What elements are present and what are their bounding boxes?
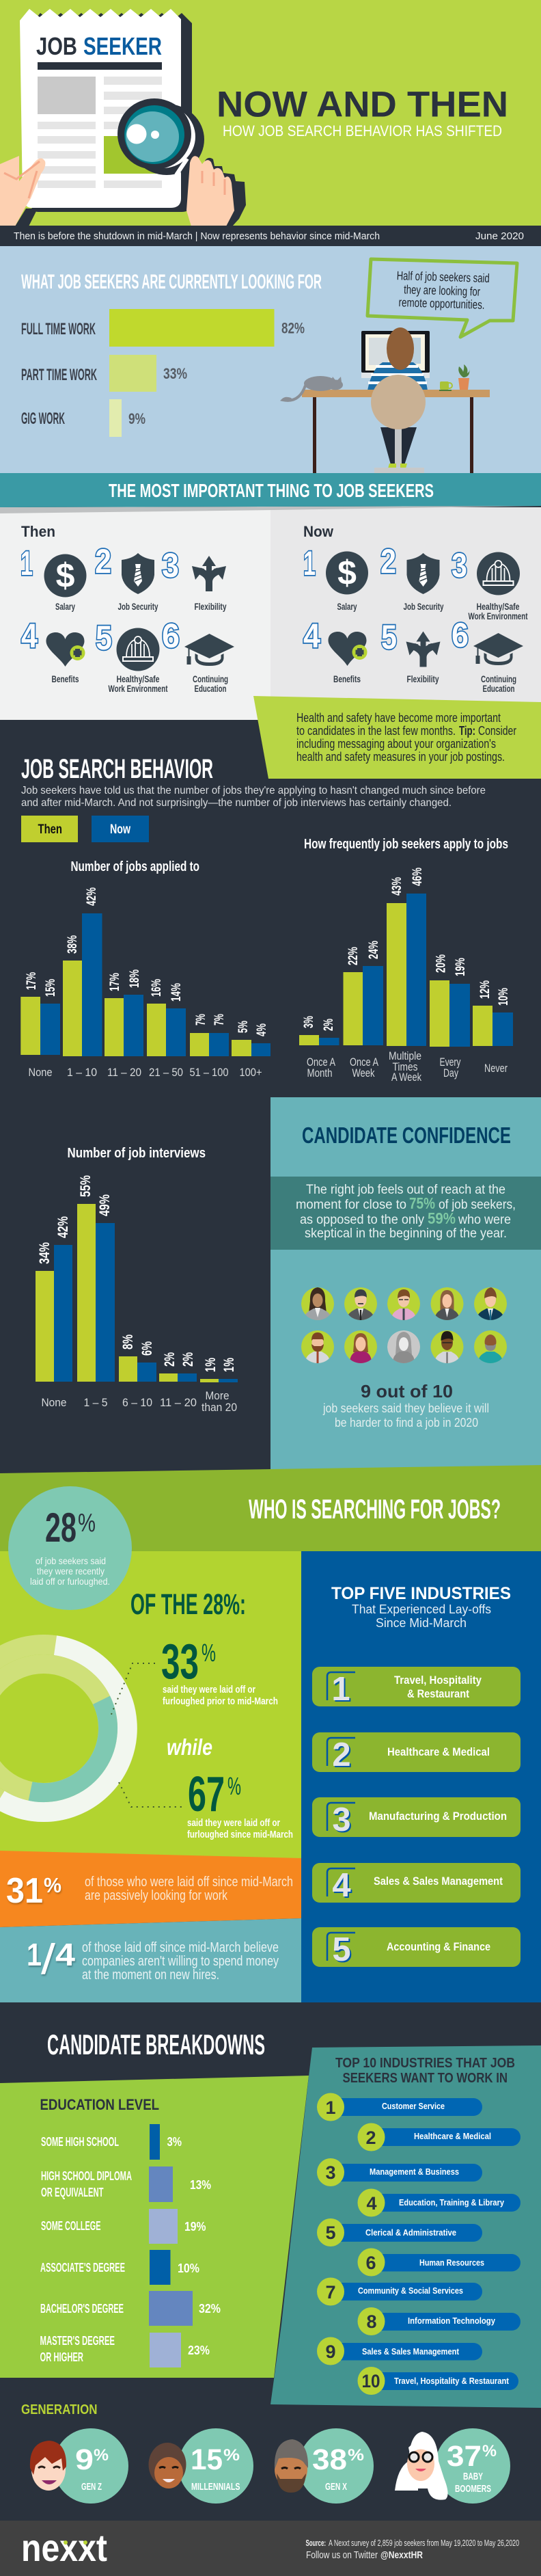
then ranking: 3 xyxy=(162,546,179,585)
callout: health and safety tip: to candidates in the last few months. xyxy=(296,724,456,738)
statement band: The right job feels out of reach at the xyxy=(306,1183,505,1197)
item 6: Human Resources xyxy=(419,2257,484,2268)
now ranking: 5 xyxy=(381,618,397,656)
generation: gen x: GEN X xyxy=(325,2481,347,2493)
then ranking: 4 xyxy=(21,617,38,655)
panel background: candidate confidence xyxy=(270,1097,541,1473)
bar chart: number of job interviews: 2% xyxy=(162,1352,178,1367)
now ranking: Education xyxy=(482,683,515,694)
then ranking xyxy=(20,523,234,694)
bar chart: number of job interviews: 55% xyxy=(78,1175,94,1197)
bar chart: number of job interviews: 11 – 20 xyxy=(160,1396,197,1409)
bar chart: how frequently job seekers apply: Day xyxy=(443,1066,458,1079)
bar chart: number of job interviews: 6 – 10 xyxy=(122,1396,152,1409)
bar chart: number of jobs applied to: 38% xyxy=(66,935,80,954)
stat: 9 out of 10: be harder to find a job in 2020 xyxy=(335,1416,478,1430)
generation: millennials xyxy=(149,2428,253,2504)
stat: 67%: said they were laid off or xyxy=(187,1818,280,1829)
bar chart: how frequently job seekers apply: Month xyxy=(307,1066,332,1079)
generation: gen x: 38 xyxy=(312,2443,347,2476)
stat circle: 28%: they were recently xyxy=(37,1566,105,1577)
statement band: skeptical in the beginning of the year. xyxy=(305,1226,507,1241)
bar chart: number of jobs applied to: 42% xyxy=(85,887,99,906)
bar chart: number of jobs applied to: None xyxy=(29,1066,52,1079)
bar chart: number of jobs applied to: 5% xyxy=(236,1021,251,1033)
callout: health and safety tip xyxy=(253,696,541,779)
industry 1 xyxy=(312,1667,521,1708)
avatar: woman dark jacket xyxy=(430,1287,463,1320)
callout: health and safety tip: Consider xyxy=(478,724,516,738)
item 1: 1 xyxy=(325,2097,336,2118)
definition band xyxy=(0,226,541,246)
bar: high school diploma: 13% xyxy=(190,2178,211,2192)
industry 5 xyxy=(312,1927,521,1968)
bar chart: work type: 82% xyxy=(281,320,305,336)
bar: high school diploma: HIGH SCHOOL DIPLOMA xyxy=(41,2169,132,2183)
item 7: Community & Social Services xyxy=(358,2285,463,2296)
item 5: Clerical & Administrative xyxy=(365,2227,456,2238)
bar chart: number of jobs applied to: 11 – 20 xyxy=(107,1066,141,1079)
now ranking xyxy=(303,523,528,694)
panel: top five industries xyxy=(312,1584,521,1968)
stat: 33%: furloughed prior to mid-March xyxy=(163,1696,278,1707)
item 3: Management & Business xyxy=(370,2166,459,2177)
bar chart: work type: 33% xyxy=(163,365,187,382)
bar: master's degree: 23% xyxy=(188,2344,210,2357)
avatar: man grey suit xyxy=(344,1287,377,1320)
heading: SEEKERS WANT TO WORK IN xyxy=(343,2071,508,2086)
avatar: bearded man red tie xyxy=(301,1330,334,1363)
now ranking: 3 xyxy=(452,546,467,585)
source note: @NexxtHR xyxy=(380,2549,423,2561)
statement band: 59% xyxy=(428,1209,456,1227)
heading: TOP FIVE INDUSTRIES xyxy=(331,1584,511,1603)
leader line: 33% xyxy=(111,1663,155,1716)
legend: Now xyxy=(110,822,130,837)
heading xyxy=(331,1584,511,1630)
generation: baby boomers: BABY xyxy=(463,2471,483,2482)
heading: EDUCATION LEVEL xyxy=(40,2096,159,2113)
item 10 xyxy=(358,2367,518,2395)
industry 2: Healthcare & Medical xyxy=(387,1745,490,1758)
bar chart: number of job interviews: 49% xyxy=(97,1194,113,1216)
generation: millennials: 15 xyxy=(191,2443,223,2476)
stat circle: 28%: 28 xyxy=(45,1505,77,1551)
generation: gen z: GEN Z xyxy=(81,2481,102,2493)
heading: Since Mid-March xyxy=(376,1616,467,1630)
callout: remote opportunities xyxy=(367,259,517,337)
bar chart: number of job interviews: 6% xyxy=(139,1341,155,1356)
callout: health and safety tip: including messaging about your organization's xyxy=(296,737,496,751)
leader line: 67% xyxy=(119,1782,183,1807)
bar chart: how frequently job seekers apply xyxy=(299,837,513,1084)
bar: master's degree xyxy=(40,2333,210,2367)
legend: Then xyxy=(38,822,62,837)
bar chart: how frequently job seekers apply: Week xyxy=(352,1066,375,1079)
stat: 9 out of 10: 9 out of 10 xyxy=(361,1381,453,1401)
then ranking: Continuing xyxy=(193,673,228,684)
generation: gen x: % xyxy=(348,2446,364,2465)
bar chart: number of job interviews: than 20 xyxy=(202,1401,237,1414)
callout: health and safety tip: Tip: xyxy=(459,724,475,738)
title: NOW AND THEN xyxy=(217,85,508,124)
industry 4: Sales & Sales Management xyxy=(374,1875,503,1888)
then ranking: Benefits xyxy=(52,673,79,684)
band: 31% passively looking: 31 xyxy=(6,1871,43,1911)
bar chart: how frequently job seekers apply: 22% xyxy=(346,947,361,965)
generation: gen z xyxy=(30,2428,128,2504)
panel: currently looking for xyxy=(0,246,541,474)
then ranking: Work Environment xyxy=(108,683,168,694)
definition band: June 2020 xyxy=(475,231,524,242)
bar: bachelor's degree xyxy=(40,2291,221,2326)
band: 1/4 believe xyxy=(0,1918,301,2003)
heading: TOP 10 INDUSTRIES THAT JOB xyxy=(335,2056,515,2071)
industry 1: & Restaurant xyxy=(407,1687,469,1700)
stat: 67%: furloughed since mid-March xyxy=(187,1829,293,1840)
now ranking: Now xyxy=(303,523,334,540)
bar chart: how frequently job seekers apply: Once A xyxy=(307,1056,335,1069)
industry 3 xyxy=(312,1797,521,1838)
now ranking: 2 xyxy=(380,542,396,580)
industry 2 xyxy=(312,1732,521,1773)
industry 1: Travel, Hospitality xyxy=(394,1674,482,1687)
bar: associate's degree: ASSOCIATE'S DEGREE xyxy=(40,2261,125,2275)
avatar: grey silhouette xyxy=(387,1330,420,1363)
bar chart: how frequently job seekers apply: 43% xyxy=(390,877,404,896)
item 7 xyxy=(317,2278,482,2305)
bar chart: work type: 9% xyxy=(128,410,145,427)
item 2 xyxy=(358,2123,521,2151)
stat: 9 out of 10: job seekers said they believe it will xyxy=(322,1401,489,1415)
avatar: man pink shirt glasses xyxy=(387,1287,420,1320)
item 5 xyxy=(317,2218,482,2246)
industry 5: 5 xyxy=(332,1931,351,1968)
band: 1/4 believe: 4 xyxy=(55,1937,75,1972)
illustration: newspaper with hands and magnifier xyxy=(0,9,246,226)
item 9: 9 xyxy=(325,2342,336,2362)
then ranking: Education xyxy=(194,683,227,694)
band: 31% passively looking xyxy=(0,1851,301,1927)
bar chart: number of job interviews: 1 – 5 xyxy=(83,1396,108,1409)
bar chart: how frequently job seekers apply: Times xyxy=(392,1060,418,1073)
item 2: 2 xyxy=(365,2128,376,2148)
bar chart: number of job interviews: More xyxy=(205,1389,230,1402)
bar: bachelor's degree: BACHELOR'S DEGREE xyxy=(40,2302,124,2316)
heading: of the 28%: OF THE 28%: xyxy=(130,1588,246,1621)
statement band: 75% xyxy=(409,1194,435,1212)
bar chart: number of job interviews: 2% xyxy=(180,1352,196,1367)
then ranking: Flexibility xyxy=(194,601,227,612)
item 8: Information Technology xyxy=(408,2316,496,2326)
source note xyxy=(306,2538,519,2561)
statement band: of job seekers, xyxy=(439,1198,516,1212)
bar chart: number of job interviews: 34% xyxy=(37,1242,53,1264)
bar chart: number of jobs applied to: 7% xyxy=(212,1014,227,1025)
item 4 xyxy=(358,2189,521,2216)
now ranking: Job Security xyxy=(403,601,444,612)
industry 5: Accounting & Finance xyxy=(387,1940,490,1953)
band: 31% passively looking: % xyxy=(44,1873,61,1897)
source note: Follow us on Twitter xyxy=(306,2549,378,2561)
heading: That Experienced Lay-offs xyxy=(352,1602,491,1616)
stat: 33%: said they were laid off or xyxy=(163,1685,255,1695)
statement band: moment for close to xyxy=(296,1198,406,1212)
bar: bachelor's degree: 32% xyxy=(199,2302,221,2316)
bar chart: how frequently job seekers apply: 2% xyxy=(322,1019,336,1031)
stat circle: 28% xyxy=(8,1486,132,1610)
then ranking: 6 xyxy=(162,617,180,655)
stat: 67% xyxy=(187,1767,293,1840)
item 7: 7 xyxy=(325,2282,336,2303)
bar chart: how frequently job seekers apply: Multiple xyxy=(389,1049,421,1062)
word: while: while xyxy=(167,1734,212,1760)
bar chart: number of jobs applied to: 17% xyxy=(108,973,122,991)
band: 1/4 believe: / xyxy=(41,1936,56,1983)
then ranking: Job Security xyxy=(117,601,158,612)
bar chart: how frequently job seekers apply: Never xyxy=(484,1062,508,1075)
bar: some college xyxy=(41,2209,206,2244)
generation: baby boomers xyxy=(395,2428,510,2504)
item 4: 4 xyxy=(366,2193,377,2214)
bar chart: work type xyxy=(21,309,305,437)
band: 1/4 believe: companies aren't willing to spend money xyxy=(82,1954,279,1969)
now ranking: 1 xyxy=(303,544,316,582)
generation: baby boomers: BOOMERS xyxy=(455,2483,491,2495)
then ranking: Salary xyxy=(55,601,75,612)
stat: 67%: 67 xyxy=(188,1767,225,1822)
stat circle: 28%: laid off or furloughed. xyxy=(30,1576,110,1587)
header background xyxy=(0,0,541,226)
bar chart: how frequently job seekers apply: 20% xyxy=(434,954,448,973)
now ranking: Continuing xyxy=(481,673,516,684)
stat: 33%: % xyxy=(202,1639,216,1667)
industry 3: 3 xyxy=(332,1801,351,1838)
generation: millennials: % xyxy=(223,2446,240,2465)
then ranking: 2 xyxy=(95,542,111,580)
now ranking: 4 xyxy=(303,617,320,655)
panel background: now xyxy=(270,507,541,726)
dark section background: candidate breakdowns xyxy=(0,2002,541,2522)
subtitle: HOW JOB SEARCH BEHAVIOR HAS SHIFTED xyxy=(223,122,502,139)
industry 4 xyxy=(312,1863,521,1904)
legend xyxy=(21,816,149,842)
bar chart: how frequently job seekers apply: Once A xyxy=(350,1056,378,1069)
donut chart xyxy=(0,1645,127,1812)
item 6 xyxy=(358,2248,521,2277)
bar chart: work type: GIG WORK xyxy=(21,410,65,428)
bar: master's degree: OR HIGHER xyxy=(40,2350,83,2364)
stat: 33% xyxy=(161,1635,278,1707)
bar chart: how frequently job seekers apply: 10% xyxy=(497,988,511,1006)
now ranking: 6 xyxy=(452,616,469,654)
bar: some high school: 3% xyxy=(167,2135,182,2149)
generation: baby boomers: % xyxy=(482,2442,497,2460)
item 6: 6 xyxy=(365,2253,376,2273)
generation: millennials: MILLENNIALS xyxy=(191,2481,240,2493)
avatar: man navy suit xyxy=(474,1287,507,1320)
generation: gen x xyxy=(275,2428,374,2504)
section banner: most important xyxy=(0,473,541,507)
definition band: Then is before the shutdown in mid-March | Now represents behavior since mid-March xyxy=(14,231,380,242)
now ranking: Benefits xyxy=(333,673,361,684)
generation: gen z: % xyxy=(94,2446,109,2465)
heading: job search behavior: JOB SEARCH BEHAVIOR xyxy=(21,754,213,784)
bar chart: number of jobs applied to: 21 – 50 xyxy=(149,1066,183,1079)
industry 3: Manufacturing & Production xyxy=(369,1810,507,1823)
item 3: 3 xyxy=(325,2162,336,2183)
bar chart: how frequently job seekers apply: 19% xyxy=(454,958,468,976)
bar chart: work type: FULL TIME WORK xyxy=(21,320,96,338)
bar chart: number of job interviews: 1% xyxy=(221,1358,237,1372)
statement band xyxy=(270,1177,541,1250)
bar: some high school: SOME HIGH SCHOOL xyxy=(41,2135,119,2149)
stat: 33%: 33 xyxy=(161,1635,199,1689)
band: 1/4 believe: at the moment on new hires. xyxy=(82,1968,219,1983)
heading xyxy=(335,2056,515,2086)
bar: some college: 19% xyxy=(184,2220,206,2233)
industry 2: 2 xyxy=(332,1736,351,1773)
heading: candidate breakdowns: CANDIDATE BREAKDOWNS xyxy=(47,2028,265,2061)
stat: 9 out of 10 xyxy=(322,1381,489,1430)
panel: of the 28% xyxy=(0,1551,301,1859)
bar chart: number of job interviews: 8% xyxy=(120,1334,136,1350)
stat circle: 28%: % xyxy=(78,1509,96,1538)
intro paragraph: and after mid-March. And not surprisingly—the number of job interviews has certainly changed. xyxy=(21,797,452,809)
bar chart: number of jobs applied to: 1 – 10 xyxy=(67,1066,97,1079)
industry 4: 4 xyxy=(332,1867,351,1904)
bar chart: number of job interviews xyxy=(36,1146,238,1414)
bar chart: number of jobs applied to: 18% xyxy=(128,969,142,988)
item 8 xyxy=(358,2307,521,2335)
now ranking: Healthy/Safe xyxy=(477,601,520,612)
bar chart: how frequently job seekers apply: 3% xyxy=(302,1016,316,1028)
item 2: Healthcare & Medical xyxy=(414,2131,491,2141)
panel: candidate confidence xyxy=(270,1123,541,1430)
item 9: Sales & Sales Management xyxy=(362,2346,460,2357)
panel: education level xyxy=(0,2076,309,2378)
bar chart: how frequently job seekers apply: 12% xyxy=(478,980,493,999)
item 3 xyxy=(317,2158,482,2186)
band: 31% passively looking: of those who were laid off since mid-March xyxy=(85,1875,293,1890)
then ranking: Then xyxy=(21,523,55,540)
item 10: Travel, Hospitality & Restaurant xyxy=(394,2376,510,2386)
industry 1: 1 xyxy=(331,1671,350,1708)
then ranking: 1 xyxy=(20,544,33,582)
bar: some college: SOME COLLEGE xyxy=(41,2219,101,2233)
bar chart: number of jobs applied to: 17% xyxy=(25,972,39,990)
bar chart: how frequently job seekers apply: 46% xyxy=(411,868,425,886)
avatar: woman magenta top xyxy=(344,1330,377,1363)
panel: top 10 industries xyxy=(270,2045,541,2408)
bar chart: work type: PART TIME WORK xyxy=(21,366,97,384)
heading: generation: GENERATION xyxy=(21,2402,97,2417)
bar chart: how frequently job seekers apply: 24% xyxy=(367,941,381,959)
stat circle: 28%: of job seekers said xyxy=(36,1555,106,1566)
then ranking: 5 xyxy=(96,619,112,657)
intro paragraph: Job seekers have told us that the number of jobs they're applying to hasn't changed much since before xyxy=(21,785,486,796)
illustration: woman at desk with cat xyxy=(283,327,490,473)
bar chart: number of jobs applied to: 16% xyxy=(150,979,164,997)
bar chart: how frequently job seekers apply: A Week xyxy=(391,1071,421,1084)
bar chart: number of job interviews: 1% xyxy=(203,1358,219,1372)
section banner: who is searching xyxy=(0,1465,541,1551)
footer xyxy=(0,2521,541,2576)
bar chart: number of job interviews: None xyxy=(41,1396,67,1409)
panel background: then xyxy=(0,507,270,726)
bar: high school diploma: OR EQUIVALENT xyxy=(41,2186,104,2199)
illustration: newspaper with hands and magnifier: SEEKER xyxy=(83,32,162,60)
bar chart: number of job interviews: 42% xyxy=(55,1216,71,1238)
bar chart: number of jobs applied to: 15% xyxy=(44,979,58,997)
bar: master's degree: MASTER'S DEGREE xyxy=(40,2334,115,2348)
bar: associate's degree xyxy=(40,2250,199,2285)
band: 31% passively looking: are passively looking for work xyxy=(85,1888,228,1903)
avatar: dark man glasses xyxy=(430,1330,463,1363)
statement band: as opposed to the only xyxy=(300,1213,424,1227)
bar chart: number of jobs applied to: 100+ xyxy=(239,1066,262,1079)
item 1 xyxy=(317,2093,482,2121)
generation: gen z: 9 xyxy=(75,2443,94,2476)
item 10: 10 xyxy=(362,2371,380,2391)
avatar: bald man grey beard xyxy=(474,1330,507,1363)
panel: top five industries background xyxy=(301,1551,541,2003)
bar chart: number of jobs applied to: 51 – 100 xyxy=(190,1066,228,1079)
bar chart: how frequently job seekers apply: Every xyxy=(440,1056,461,1069)
logo: nexxt: nexxt xyxy=(21,2526,107,2569)
band: 1/4 believe: of those laid off since mid-March believe xyxy=(82,1940,279,1955)
callout: remote opportunities: they are looking for xyxy=(404,282,480,299)
item 5: 5 xyxy=(325,2223,336,2243)
band: 1/4 believe: 1 xyxy=(27,1937,42,1972)
bar chart: number of jobs applied to: Number of jobs applied to xyxy=(71,859,199,874)
dark section background: job search behavior xyxy=(0,720,541,1473)
callout: remote opportunities: Half of job seekers said xyxy=(396,269,490,285)
bar chart: number of jobs applied to: 7% xyxy=(194,1014,208,1025)
bar: some high school xyxy=(41,2124,182,2160)
avatar: woman long dark hair xyxy=(301,1287,334,1320)
bar: high school diploma xyxy=(41,2166,211,2202)
bar chart: number of job interviews: Number of job interviews xyxy=(67,1146,206,1161)
bar: associate's degree: 10% xyxy=(178,2262,199,2275)
now ranking: Salary xyxy=(337,601,357,612)
now ranking: Flexibility xyxy=(407,673,439,684)
item 1: Customer Service xyxy=(382,2101,445,2111)
intro paragraph xyxy=(21,785,486,809)
bar chart: number of jobs applied to: 14% xyxy=(169,983,184,1002)
callout: remote opportunities: remote opportunities. xyxy=(398,295,485,312)
item 4: Education, Training & Library xyxy=(399,2197,505,2208)
then ranking: Healthy/Safe xyxy=(116,673,160,684)
source note: Source: xyxy=(306,2538,326,2548)
illustration: newspaper with hands and magnifier: JOB xyxy=(36,32,77,60)
bar chart: number of jobs applied to xyxy=(20,859,270,1079)
stat: 67%: % xyxy=(227,1772,241,1800)
generation: baby boomers: 37 xyxy=(447,2440,482,2473)
item 9 xyxy=(317,2337,482,2365)
statement band: who were xyxy=(458,1213,511,1227)
item 8: 8 xyxy=(366,2311,377,2332)
bar chart: number of jobs applied to: 4% xyxy=(255,1023,269,1036)
